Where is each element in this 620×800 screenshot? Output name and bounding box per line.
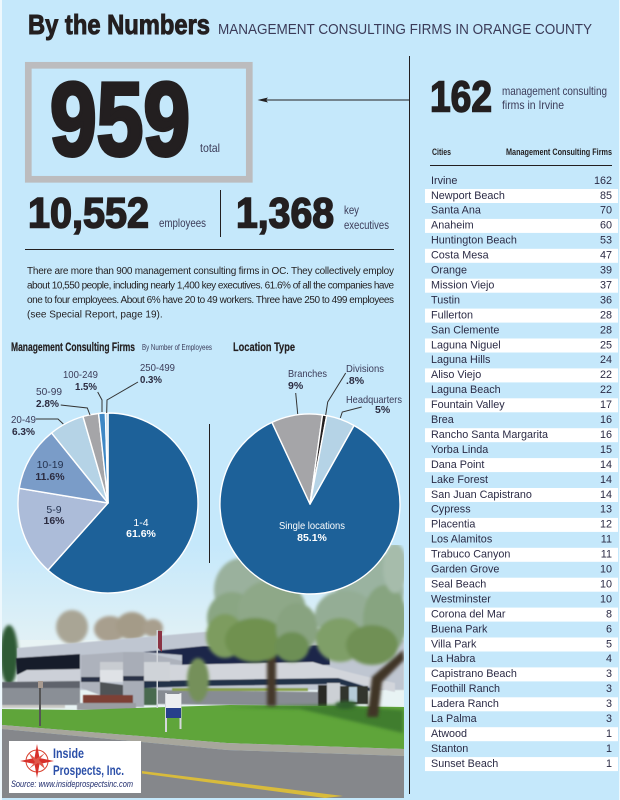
table: cities and firm counts: 16 bbox=[600, 429, 612, 441]
table: cities and firm counts: 1 bbox=[606, 743, 612, 755]
table: cities and firm counts: 16 bbox=[600, 414, 612, 426]
table: cities and firm counts: Trabuco Canyon bbox=[431, 549, 510, 561]
table: cities and firm counts: Los Alamitos bbox=[431, 534, 493, 546]
table: cities and firm counts: Capistrano Beach bbox=[431, 668, 517, 680]
table: cities and firm counts: Garden Grove bbox=[431, 564, 499, 576]
heading: employee chart: Management Consulting Firms bbox=[11, 340, 135, 354]
table: cities and firm counts bbox=[431, 175, 612, 770]
pie chart: location type: 85.1% bbox=[297, 532, 328, 544]
table: cities and firm counts: Buena Park bbox=[431, 623, 488, 635]
logo: Inside Prospects, Inc.: Inside bbox=[53, 745, 84, 761]
table: cities and firm counts: 10 bbox=[600, 593, 612, 605]
pie chart: firms by number of employees: 16% bbox=[43, 515, 65, 527]
foliage bbox=[187, 543, 407, 717]
photo: office building with trees and road bbox=[0, 543, 407, 798]
road and curb bbox=[2, 725, 404, 756]
pie chart: location type: Single locations bbox=[279, 520, 345, 532]
pie chart: firms by number of employees: 20-49 bbox=[11, 414, 36, 426]
table: cities and firm counts: 70 bbox=[600, 205, 612, 217]
table: cities and firm counts: 10 bbox=[600, 564, 612, 576]
pie chart: firms by number of employees: 0.3% bbox=[140, 374, 163, 386]
table: cities and firm counts: 22 bbox=[600, 384, 612, 396]
table: cities and firm counts: 3 bbox=[606, 698, 612, 710]
arrow to Irvine column bbox=[258, 98, 409, 102]
table: cities and firm counts: 28 bbox=[600, 309, 612, 321]
callout: 162 firms in Irvine: 162 bbox=[430, 72, 492, 122]
table: cities and firm counts: Cypress bbox=[431, 504, 471, 516]
table: cities and firm counts: 4 bbox=[606, 653, 612, 665]
pie chart: firms by number of employees: 1.5% bbox=[75, 381, 98, 393]
table: cities and firm counts: 3 bbox=[606, 668, 612, 680]
summary paragraph: There are more than 900 management consulting firms in OC. They collectively employ bbox=[27, 266, 394, 277]
callout: 162 firms in Irvine bbox=[430, 72, 607, 122]
pie chart: location type: 9% bbox=[288, 380, 304, 392]
table: cities and firm counts: 14 bbox=[600, 489, 612, 501]
pie chart: location type: Headquarters bbox=[346, 394, 402, 406]
pie chart: location type bbox=[220, 363, 402, 594]
stat: key executives: 1,368 bbox=[236, 190, 334, 238]
pie chart: firms by number of employees bbox=[11, 362, 198, 593]
table: cities and firm counts: 11 bbox=[601, 549, 612, 561]
table: cities and firm counts: 8 bbox=[606, 608, 612, 620]
table: cities and firm counts: 47 bbox=[600, 250, 612, 262]
table: cities and firm counts: Yorba Linda bbox=[431, 444, 488, 456]
table: cities and firm counts: Placentia bbox=[431, 519, 475, 531]
table: cities and firm counts: 60 bbox=[600, 220, 612, 232]
heading: employee chart: By Number of Employees bbox=[142, 343, 212, 352]
pie chart: firms by number of employees: 61.6% bbox=[126, 528, 157, 540]
summary paragraph: one to four employees. About 6% have 20 to 49 workers. Three have 250 to 499 employees bbox=[27, 295, 394, 306]
table: cities and firm counts: Laguna Beach bbox=[431, 384, 501, 396]
table header: Cities bbox=[432, 147, 451, 157]
vertical column rule bbox=[408, 56, 410, 794]
callout box: 959 total bbox=[28, 62, 249, 179]
pie chart: location type: 5% bbox=[375, 404, 391, 416]
table: cities and firm counts: Stanton bbox=[431, 743, 468, 755]
table: cities and firm counts: Fountain Valley bbox=[431, 399, 505, 411]
lawn bbox=[2, 705, 404, 749]
table: cities and firm counts: La Palma bbox=[431, 713, 477, 725]
table: cities and firm counts: 11 bbox=[601, 534, 612, 546]
table: cities and firm counts: 22 bbox=[600, 369, 612, 381]
table: cities and firm counts: Huntington Beach bbox=[431, 235, 517, 247]
table: cities and firm counts: Laguna Hills bbox=[431, 354, 491, 366]
table: cities and firm counts: Orange bbox=[431, 265, 467, 277]
table: cities and firm counts: Tustin bbox=[431, 294, 460, 306]
table: cities and firm counts: Brea bbox=[431, 414, 454, 426]
logo: Inside Prospects, Inc. bbox=[9, 741, 141, 793]
summary paragraph: (see Special Report, page 19). bbox=[27, 310, 163, 320]
table: cities and firm counts: 1 bbox=[606, 758, 612, 770]
pie chart: firms by number of employees: 250-499 bbox=[140, 362, 175, 374]
pie chart: firms by number of employees: 5-9 bbox=[46, 504, 62, 516]
table: cities and firm counts: 10 bbox=[600, 579, 612, 591]
table: cities and firm counts: Newport Beach bbox=[431, 190, 505, 202]
table: cities and firm counts: Irvine bbox=[431, 175, 457, 187]
table: cities and firm counts: 1 bbox=[606, 728, 612, 740]
table: cities and firm counts: Corona del Mar bbox=[431, 608, 506, 620]
table: cities and firm counts: Anaheim bbox=[431, 220, 474, 232]
table: cities and firm counts: San Juan Capistrano bbox=[431, 489, 532, 501]
table: cities and firm counts: 15 bbox=[600, 444, 612, 456]
table: cities and firm counts: Laguna Niguel bbox=[431, 339, 501, 351]
table: cities and firm counts: Villa Park bbox=[431, 638, 477, 650]
employees label: employees bbox=[159, 216, 206, 230]
table row stripes bbox=[425, 189, 618, 771]
table: cities and firm counts: 14 bbox=[600, 459, 612, 471]
table: cities and firm counts: Dana Point bbox=[431, 459, 484, 471]
table: cities and firm counts: Atwood bbox=[431, 728, 467, 740]
table: cities and firm counts: Ladera Ranch bbox=[431, 698, 499, 710]
icon: compass star bbox=[20, 744, 54, 778]
table: cities and firm counts: Aliso Viejo bbox=[431, 369, 481, 381]
table: cities and firm counts: La Habra bbox=[431, 653, 475, 665]
table: cities and firm counts: 28 bbox=[600, 324, 612, 336]
table: cities and firm counts: Westminster bbox=[431, 593, 491, 605]
table: cities and firm counts: 12 bbox=[600, 519, 612, 531]
pie chart: location type: Branches bbox=[288, 368, 327, 380]
table: cities and firm counts: San Clemente bbox=[431, 324, 499, 336]
pie chart: firms by number of employees: 10-19 bbox=[37, 459, 64, 471]
callout: 162 firms in Irvine: firms in Irvine bbox=[502, 98, 564, 112]
heading: location chart: Location Type bbox=[233, 340, 295, 354]
pie chart: firms by number of employees: 100-249 bbox=[63, 369, 98, 381]
table: cities and firm counts: Foothill Ranch bbox=[431, 683, 500, 695]
table: cities and firm counts: 3 bbox=[606, 713, 612, 725]
pie chart: firms by number of employees: 2.8% bbox=[36, 398, 60, 410]
logo: Inside Prospects, Inc.: Prospects, Inc. bbox=[53, 762, 124, 778]
table: cities and firm counts: Costa Mesa bbox=[431, 250, 489, 262]
table: cities and firm counts: 162 bbox=[594, 175, 612, 187]
table: cities and firm counts: Fullerton bbox=[431, 309, 473, 321]
stat: employees: 10,552 bbox=[28, 190, 149, 238]
table: cities and firm counts: 3 bbox=[606, 683, 612, 695]
logo: Inside Prospects, Inc.: Source: www.insideprospectsinc.com bbox=[11, 779, 133, 789]
table: cities and firm counts: 36 bbox=[600, 294, 612, 306]
title: By the Numbers bbox=[28, 9, 210, 40]
table: cities and firm counts: 39 bbox=[600, 265, 612, 277]
table: cities and firm counts: 6 bbox=[606, 623, 612, 635]
title bbox=[28, 9, 592, 40]
table header bbox=[430, 147, 612, 166]
table: cities and firm counts: 5 bbox=[606, 638, 612, 650]
table: cities and firm counts: 25 bbox=[600, 339, 612, 351]
summary paragraph: about 10,550 people, including nearly 1,400 key executives. 61.6% of all the companies have bbox=[27, 280, 394, 292]
table: cities and firm counts: 17 bbox=[600, 399, 612, 411]
pie chart: location type: .8% bbox=[346, 375, 365, 387]
pie chart: firms by number of employees: 50-99 bbox=[36, 386, 62, 398]
table: cities and firm counts: Seal Beach bbox=[431, 579, 486, 591]
table: cities and firm counts: Mission Viejo bbox=[431, 280, 494, 292]
table: cities and firm counts: Rancho Santa Margarita bbox=[431, 429, 548, 441]
table: cities and firm counts: 13 bbox=[600, 504, 612, 516]
table: cities and firm counts: Santa Ana bbox=[431, 205, 481, 217]
table: cities and firm counts: Sunset Beach bbox=[431, 758, 498, 770]
table: cities and firm counts: 24 bbox=[600, 354, 612, 366]
key executives label: key bbox=[344, 203, 359, 217]
pie chart: firms by number of employees: 6.3% bbox=[12, 426, 36, 438]
pie chart: firms by number of employees: 1-4 bbox=[133, 517, 149, 529]
table: cities and firm counts: 85 bbox=[600, 190, 612, 202]
table: cities and firm counts: 53 bbox=[600, 235, 612, 247]
total label: total bbox=[200, 141, 220, 155]
pie chart: firms by number of employees: 11.6% bbox=[35, 471, 65, 483]
pie chart: location type: Divisions bbox=[346, 363, 384, 375]
table: cities and firm counts: 37 bbox=[600, 280, 612, 292]
table: cities and firm counts: 14 bbox=[600, 474, 612, 486]
flagpole and sign bbox=[38, 630, 182, 732]
key executives label: executives bbox=[344, 218, 389, 232]
table: cities and firm counts: Lake Forest bbox=[431, 474, 488, 486]
big number 959: 959 bbox=[50, 62, 190, 178]
